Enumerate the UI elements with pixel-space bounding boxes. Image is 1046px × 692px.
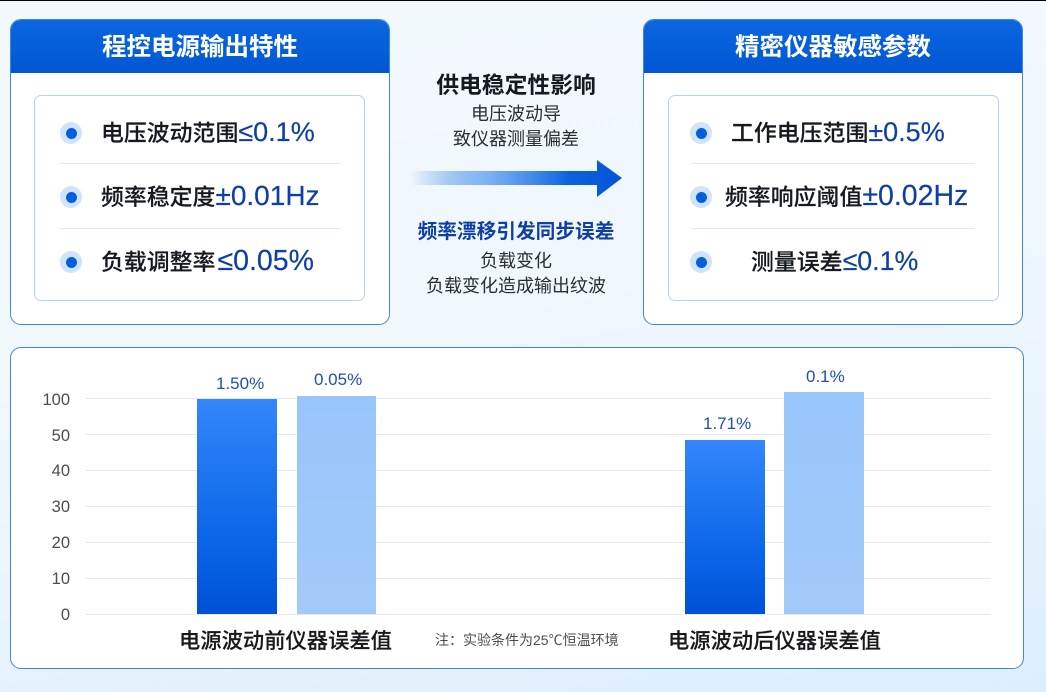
bar: before, supply xyxy=(197,399,277,614)
y axis labels: 10 xyxy=(52,570,70,588)
text block: supply stability impact: 供电稳定性影响 xyxy=(436,72,596,98)
category label: after: 电源波动后仪器误差值 xyxy=(668,629,881,653)
text block: frequency drift: 负载变化造成输出纹波 xyxy=(426,276,606,296)
arrow: power supply to instrument xyxy=(414,160,622,197)
y axis labels: 100 xyxy=(42,391,70,409)
text block: supply stability impact: 电压波动导 xyxy=(471,104,561,124)
item: voltage fluctuation range: 电压波动范围≤0.1% xyxy=(101,117,315,147)
heading: power supply output xyxy=(11,20,389,73)
item: load regulation: 负载调整率≤0.05% xyxy=(101,245,314,277)
y axis labels: 50 xyxy=(52,427,70,445)
value label: 0.1% xyxy=(806,367,845,386)
y axis labels: 20 xyxy=(52,534,70,552)
value label: 1.50% xyxy=(216,374,264,393)
y axis labels xyxy=(42,391,70,624)
bar: after, supply xyxy=(685,440,765,614)
panel: error bar chart xyxy=(10,347,1024,669)
category label: before: 电源波动前仪器误差值 xyxy=(179,629,392,653)
value label: 1.71% xyxy=(703,414,751,433)
heading: power supply output: 程控电源输出特性 xyxy=(102,34,298,61)
text block: frequency drift: 频率漂移引发同步误差 xyxy=(418,221,614,243)
item: measurement error: 测量误差≤0.1% xyxy=(751,246,918,276)
y axis labels: 0 xyxy=(61,606,70,624)
note: experiment conditions: 注：实验条件为25℃恒温环境 xyxy=(435,632,619,648)
item: frequency response threshold: 频率响应阈值±0.02Hz xyxy=(725,180,968,212)
value label: 0.05% xyxy=(314,370,362,389)
inner card: output parameter list xyxy=(34,95,365,301)
text block: supply stability impact xyxy=(436,72,596,149)
text block: frequency drift xyxy=(418,220,614,296)
inner card: instrument parameter list xyxy=(668,95,999,301)
heading: precision instrument: 精密仪器敏感参数 xyxy=(735,34,931,61)
bar chart: instrument error before and after fluctuation xyxy=(42,367,991,653)
bar: before, instrument xyxy=(297,396,376,614)
y axis labels: 30 xyxy=(52,498,70,516)
bar: after, instrument xyxy=(784,392,864,614)
panel: precision instrument sensitive parameters xyxy=(643,19,1023,325)
panel: power supply output characteristics xyxy=(10,19,390,325)
item: working voltage range: 工作电压范围±0.5% xyxy=(731,117,945,147)
item: frequency stability: 频率稳定度±0.01Hz xyxy=(101,180,320,211)
y axis labels: 40 xyxy=(52,462,70,480)
text block: supply stability impact: 致仪器测量偏差 xyxy=(453,129,579,149)
text block: frequency drift: 负载变化 xyxy=(480,251,552,271)
heading: precision instrument xyxy=(644,20,1022,73)
